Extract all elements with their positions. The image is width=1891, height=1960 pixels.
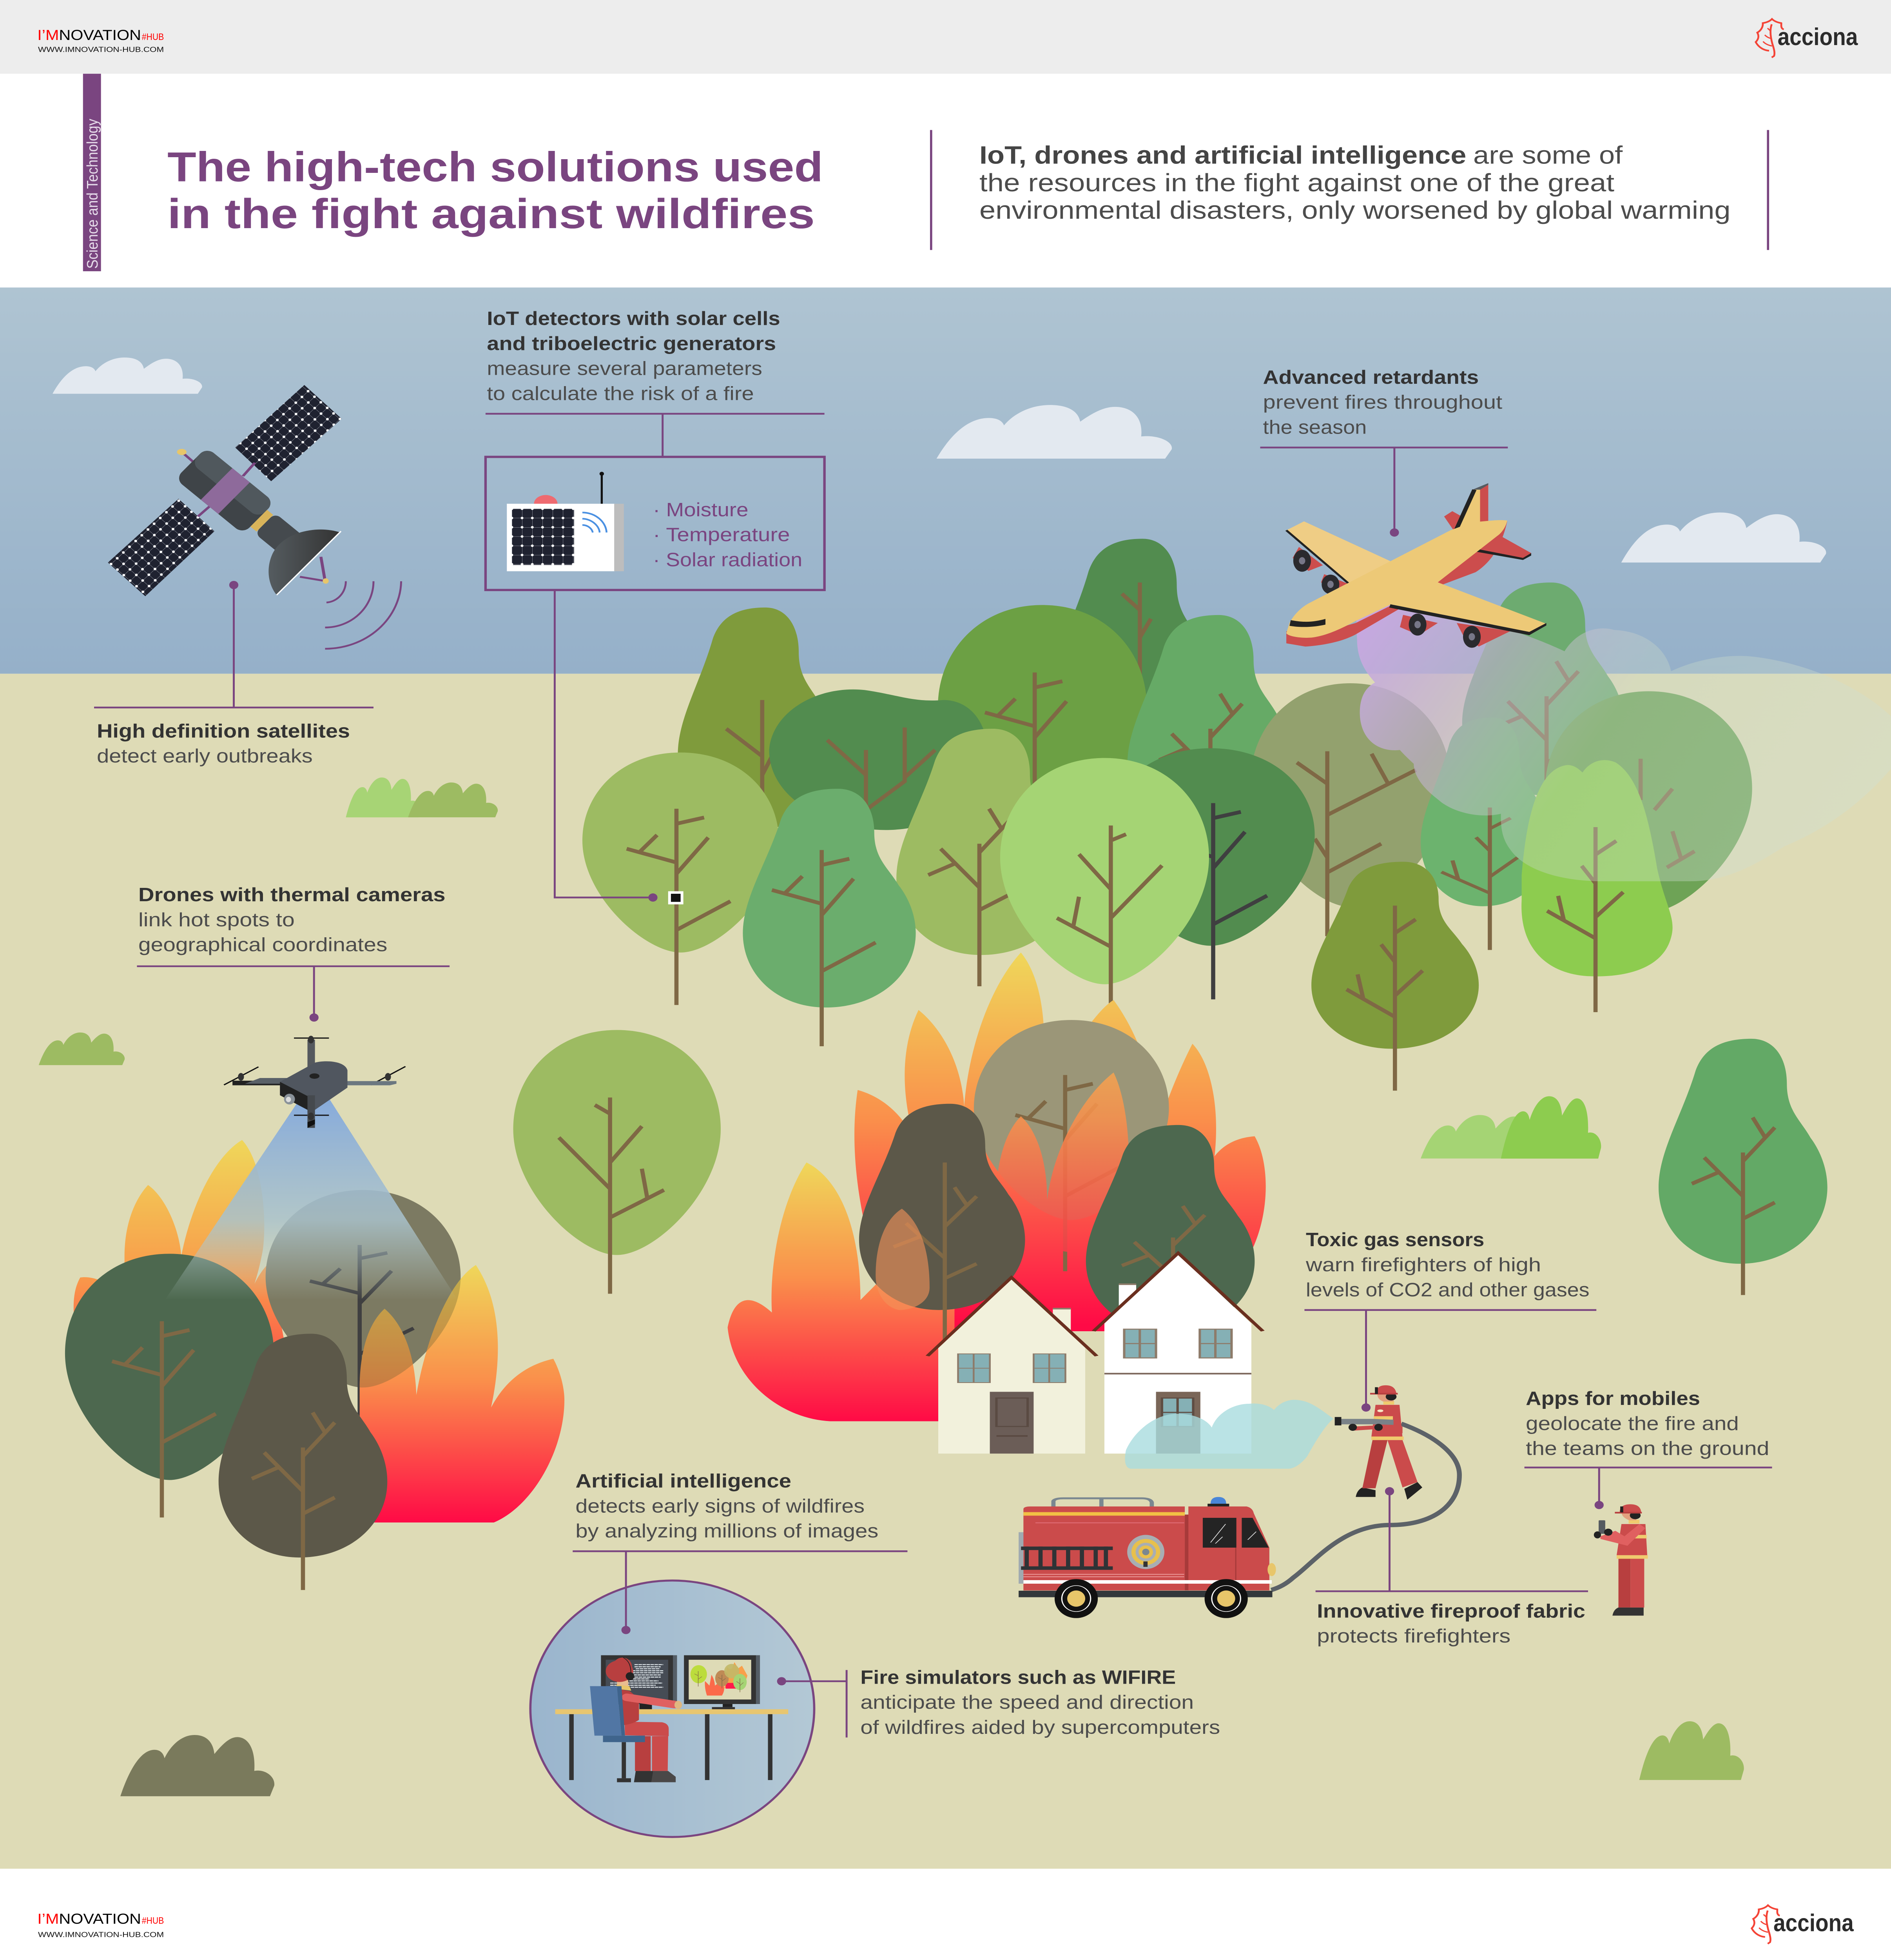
callout: High definition satellites: detect early outbreaks	[97, 746, 313, 767]
intro text block: are some of	[1473, 142, 1623, 169]
callout: Fire simulators: Fire simulators such as WIFIRE	[860, 1667, 1176, 1688]
intro text block: the resources in the fight against one of the great	[979, 169, 1614, 197]
operator	[606, 1658, 682, 1782]
forest: back row of trees	[678, 539, 1752, 950]
callout: Artificial intelligence: by analyzing millions of images	[575, 1521, 878, 1542]
callout: Toxic gas sensors: levels of CO2 and other gases	[1306, 1279, 1590, 1301]
icon: sensor on tree	[668, 891, 684, 904]
callout: Fire simulators: of wildfires aided by supercomputers	[860, 1717, 1220, 1738]
footer logo: I'Mnovation hub: WWW.IMNOVATION-HUB.COM	[38, 1931, 164, 1939]
fire: left back flames	[74, 1140, 297, 1412]
callout: Apps for mobiles: Apps for mobiles	[1526, 1388, 1700, 1410]
callout: Advanced retardants: the season	[1263, 417, 1367, 438]
callout: Artificial intelligence	[573, 1470, 907, 1634]
fire: central overlay flame	[996, 1073, 1129, 1252]
title	[167, 143, 823, 237]
sky	[0, 287, 1891, 674]
tree: grey in central fire	[974, 1020, 1169, 1271]
intro text block: IoT, drones and artificial intelligence	[979, 142, 1466, 169]
footer logo: I'Mnovation hub	[37, 1911, 164, 1939]
office chair	[590, 1686, 645, 1782]
callout: IoT detectors	[486, 308, 825, 904]
title: in the fight against wildfires	[167, 190, 815, 237]
wings and fuselage	[1286, 520, 1547, 638]
callout: IoT detectors: to calculate the risk of a fire	[487, 383, 754, 405]
tail	[1444, 483, 1531, 560]
satellite	[108, 385, 401, 649]
panel: IoT device box: · Temperature	[653, 524, 790, 546]
tree: dark brown in left fire	[219, 1334, 387, 1590]
tree: standalone olive	[513, 1030, 721, 1294]
callout: Toxic gas sensors	[1304, 1229, 1596, 1412]
cloud: centre	[937, 405, 1172, 459]
thermal camera cone	[163, 1099, 459, 1303]
callout: Innovative fireproof fabric	[1316, 1487, 1588, 1647]
callout: Artificial intelligence: Artificial intelligence	[575, 1470, 791, 1492]
drone	[224, 1036, 406, 1128]
callout: Toxic gas sensors: Toxic gas sensors	[1306, 1229, 1484, 1251]
logo: I'Mnovation hub: WWW.IMNOVATION-HUB.COM	[38, 45, 164, 54]
callout: IoT detectors: IoT detectors with solar cells	[487, 308, 780, 329]
callout: Advanced retardants: prevent fires throughout	[1263, 392, 1503, 413]
callout: High definition satellites: High definition satellites	[97, 720, 350, 742]
satellite body	[175, 447, 309, 563]
callout: IoT detectors: measure several parameters	[487, 358, 762, 379]
top header bar	[0, 0, 1891, 74]
callout: Drones: geographical coordinates	[138, 934, 387, 956]
footer logo: acciona: acciona	[1773, 1909, 1854, 1936]
hose reel	[1127, 1535, 1164, 1569]
section tag: Science and Technology: Science and Technology	[84, 118, 101, 269]
logo: I'Mnovation hub	[37, 27, 164, 54]
callout: Drones: link hot spots to	[138, 909, 295, 931]
panel: IoT device box: · Solar radiation	[653, 549, 802, 571]
logo: acciona	[1756, 19, 1858, 58]
house: white	[1093, 1253, 1263, 1454]
logo: I'Mnovation hub: I’MNOVATION	[37, 27, 141, 44]
footer	[0, 1869, 1891, 1960]
callout: Innovative fireproof fabric: protects firefighters	[1317, 1625, 1510, 1647]
desk top	[555, 1709, 788, 1714]
warning light	[1207, 1497, 1229, 1506]
tree: smoky grey in left fire	[266, 1190, 461, 1422]
callout: Apps for mobiles	[1525, 1388, 1772, 1509]
house: cream	[927, 1278, 1097, 1454]
truck chassis	[1019, 1580, 1272, 1597]
truck wheels	[1055, 1579, 1248, 1618]
tree: dark green in central fire	[1086, 1125, 1255, 1366]
callout: Advanced retardants	[1260, 367, 1508, 537]
desk legs	[569, 1714, 772, 1780]
fire: left front flames	[360, 1265, 564, 1523]
fire: central back flames	[854, 953, 1266, 1331]
fire truck	[1019, 1497, 1276, 1618]
tree: dark green in left fire	[65, 1254, 274, 1517]
footer logo: acciona	[1752, 1905, 1854, 1944]
callout: IoT detectors: and triboelectric generators	[487, 333, 776, 354]
panel: IoT device box	[486, 457, 825, 590]
tree: standalone green right	[1659, 1039, 1828, 1295]
callout: Apps for mobiles: the teams on the ground	[1526, 1438, 1769, 1459]
truck body	[1019, 1506, 1276, 1590]
callout: Drones	[137, 884, 450, 1022]
houses	[927, 1253, 1263, 1454]
firefighter with phone	[1594, 1504, 1648, 1616]
callout: Apps for mobiles: geolocate the fire and	[1526, 1413, 1739, 1434]
footer logo: I'Mnovation hub: #HUB	[142, 1916, 164, 1926]
engines and shadow	[1286, 521, 1510, 648]
callout: Drones: Drones with thermal cameras	[138, 884, 446, 906]
signal arcs	[325, 581, 401, 649]
truck side ladder	[1021, 1546, 1113, 1570]
water foam	[1125, 1400, 1334, 1469]
intro text block	[930, 130, 1769, 250]
callout: Innovative fireproof fabric: Innovative fireproof fabric	[1317, 1601, 1585, 1622]
callout: High definition satellites	[94, 581, 373, 767]
callout: Fire simulators	[777, 1667, 1220, 1738]
fire: central front flame	[728, 1163, 954, 1421]
aircraft: advanced retardants plane	[1286, 483, 1547, 648]
ground	[0, 674, 1891, 1869]
fire hose	[1271, 1424, 1459, 1590]
title: The high-tech solutions used	[167, 143, 823, 190]
callout: Artificial intelligence: detects early signs of wildfires	[575, 1495, 865, 1517]
smoke cloud from aircraft	[1356, 593, 1891, 881]
monitor with simulation	[684, 1655, 760, 1709]
callout: Toxic gas sensors: warn firefighters of high	[1305, 1254, 1541, 1276]
solar panels	[108, 385, 342, 596]
logo: I'Mnovation hub: #HUB	[142, 32, 164, 42]
truck roof ladder rail	[1053, 1498, 1152, 1506]
forest: middle row of trees	[582, 729, 1479, 1091]
monitor with code	[601, 1655, 677, 1709]
callout: Advanced retardants: Advanced retardants	[1263, 367, 1479, 388]
cloud: right	[1621, 512, 1826, 563]
intro text block: environmental disasters, only worsened by global warming	[979, 196, 1731, 224]
logo: acciona: acciona	[1778, 23, 1858, 50]
panel: AI control room circle	[530, 1581, 814, 1837]
panel: IoT device box: · Moisture	[653, 499, 749, 521]
tree: bright green pear	[1521, 760, 1673, 1012]
firefighter with hose	[1335, 1385, 1422, 1500]
tree: dark brown in central fire	[859, 1104, 1025, 1347]
bushes	[39, 777, 1744, 1796]
footer logo: I'Mnovation hub: I’MNOVATION	[37, 1911, 141, 1927]
callout: Fire simulators: anticipate the speed and direction	[860, 1691, 1194, 1713]
satellite dish	[268, 530, 341, 595]
fire: small flame over brown tree	[876, 1209, 930, 1310]
cloud: left	[53, 358, 202, 394]
